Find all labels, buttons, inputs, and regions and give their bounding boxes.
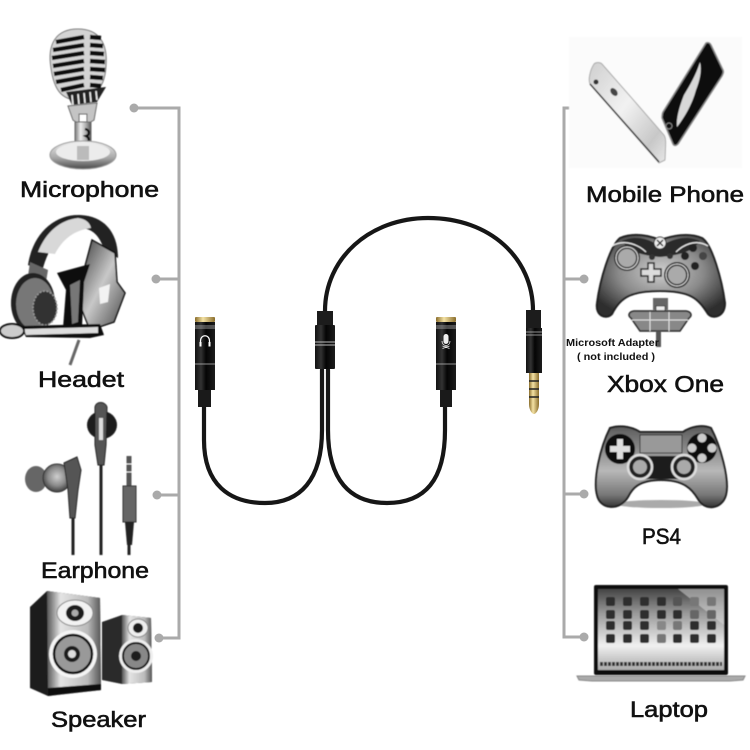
icon: speakers bbox=[30, 591, 153, 696]
label: Microsoft Adapter note: Microsoft Adapter bbox=[566, 338, 659, 349]
label: Laptop: Laptop bbox=[630, 697, 708, 722]
icon: microphone bbox=[50, 29, 116, 169]
label: Microsoft Adapter note bbox=[566, 338, 659, 363]
4-pole plug bbox=[526, 310, 542, 414]
left connector bracket bbox=[130, 104, 179, 642]
icon: earphones bbox=[25, 402, 136, 555]
icon: laptop bbox=[577, 585, 745, 681]
icon: mobile phones bbox=[569, 37, 742, 168]
label: Microsoft Adapter note: ( not included ) bbox=[577, 352, 655, 363]
label: Microphone: Microphone bbox=[20, 177, 159, 202]
Y splitter bbox=[315, 311, 335, 369]
label: Headet: Headet bbox=[38, 367, 124, 392]
cable wires bbox=[204, 218, 533, 503]
label: Speaker: Speaker bbox=[51, 707, 146, 732]
icon: headset bbox=[0, 215, 125, 365]
label: Earphone: Earphone bbox=[41, 558, 149, 583]
microphone jack bbox=[436, 317, 456, 407]
headphone jack bbox=[195, 317, 215, 407]
icon: Xbox controller with adapter bbox=[597, 235, 725, 347]
icon: PS4 controller bbox=[596, 426, 727, 508]
label: Mobile Phone: Mobile Phone bbox=[586, 182, 744, 207]
label: PS4: PS4 bbox=[642, 524, 681, 549]
right connector bracket bbox=[564, 104, 598, 642]
cable assembly bbox=[195, 218, 542, 503]
label: Xbox One: Xbox One bbox=[607, 371, 724, 397]
